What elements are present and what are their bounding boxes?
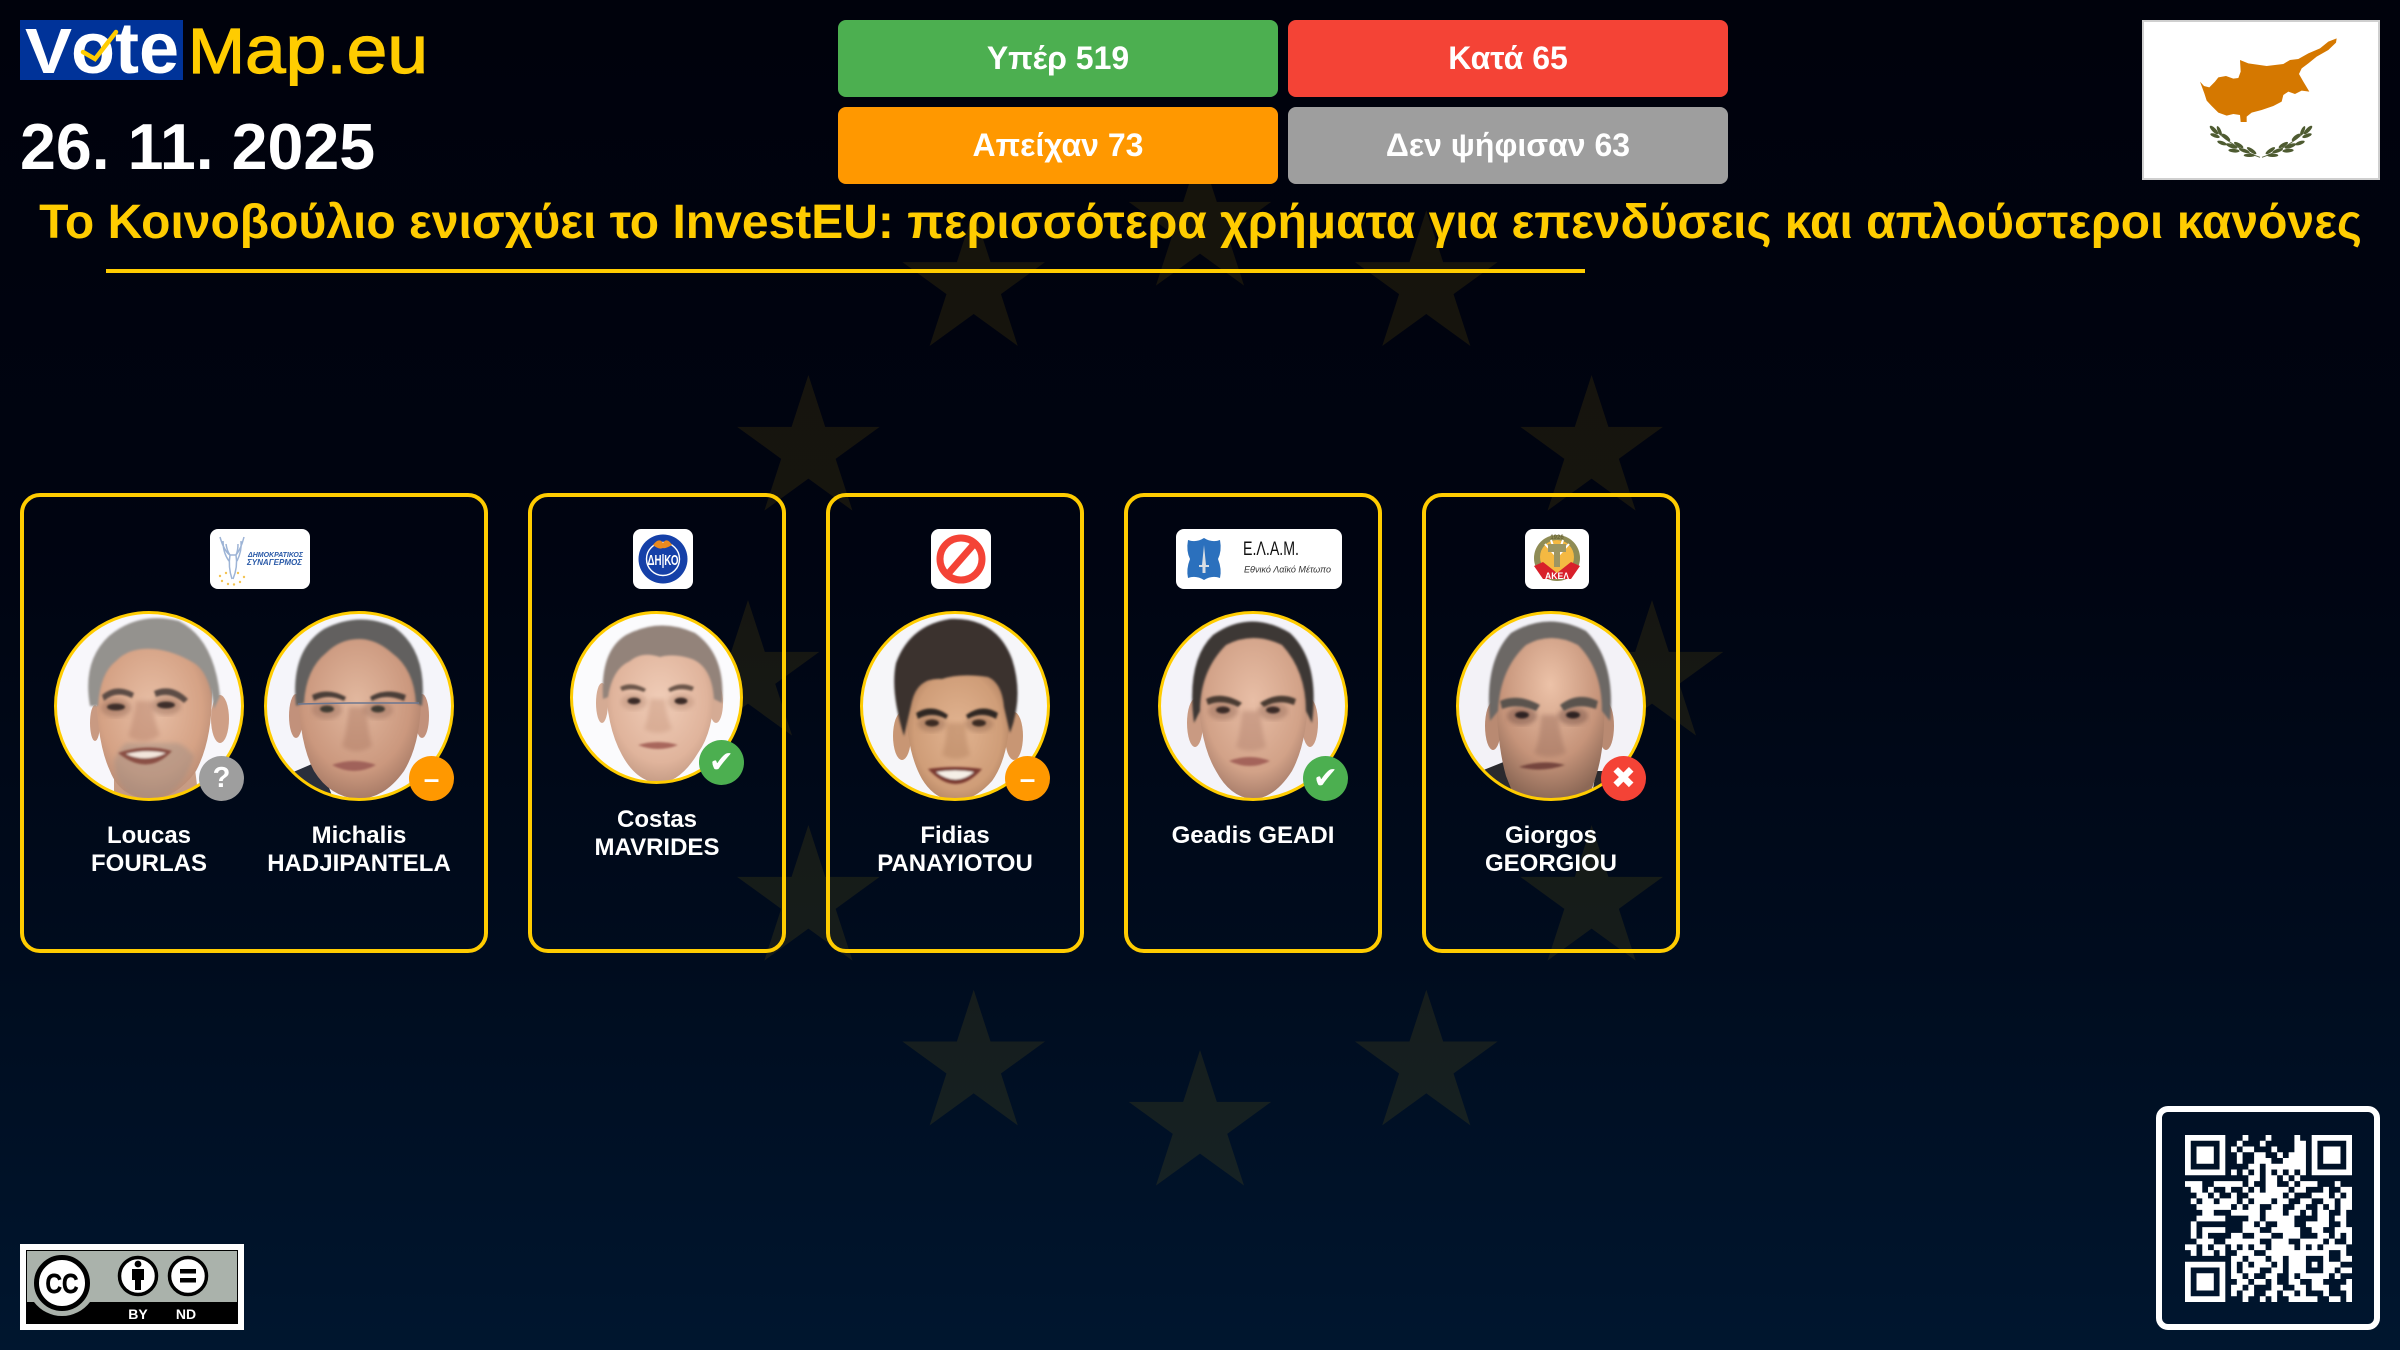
status badge: for <box>699 740 744 785</box>
panel: DISY group <box>20 493 488 953</box>
MEP: Giorgos Georgiou <box>1456 611 1646 876</box>
name <box>595 806 719 860</box>
flag of Cyprus <box>2142 20 2380 180</box>
name: Loucas <box>107 822 191 848</box>
QR code <box>2185 1135 2352 1302</box>
Creative Commons licence badge: BY <box>128 1306 148 1322</box>
status badge: against: ✖ <box>1611 761 1636 796</box>
portrait: Giorgos Georgiou <box>1456 611 1646 801</box>
status badge: did not vote: ? <box>213 762 230 794</box>
name: Giorgos <box>1505 822 1597 848</box>
party logo: AKEL: ΑΚΕΛ <box>1545 571 1569 581</box>
name: PANAYIOTOU <box>877 850 1033 876</box>
MEP: Loucas Fourlas <box>54 611 244 876</box>
status badge: for <box>1303 756 1348 801</box>
status badge: abstained <box>1005 756 1050 801</box>
name <box>1485 822 1617 876</box>
VoteMap.eu logo <box>20 20 428 86</box>
name: HADJIPANTELA <box>267 850 451 876</box>
vote totals <box>838 20 1728 184</box>
status badge: abstained <box>409 756 454 801</box>
party logo: DISY: ΔΗΜΟΚΡΑΤΙΚΟΣ <box>247 550 304 559</box>
party logo: DISY: ΣΥΝΑΓΕΡΜΟΣ <box>246 557 303 567</box>
party logo: ELAM: Ε.Λ.Α.Μ. <box>1243 539 1299 560</box>
portrait: Geadis Geadi <box>1158 611 1348 801</box>
panel: non-attached <box>826 493 1084 953</box>
name: FOURLAS <box>91 850 207 876</box>
MEP: Costas Mavrides <box>570 611 744 860</box>
title underline <box>106 269 1585 273</box>
name: Geadis GEADI <box>1172 822 1334 848</box>
MEP: Geadis Geadi <box>1158 611 1348 848</box>
party logo: AKEL <box>1525 529 1589 589</box>
for votes <box>838 20 1278 97</box>
portrait: Michalis Hadjipantela <box>264 611 454 801</box>
main title: Το Κοινοβούλιο ενισχύει το InvestEU: περισσότερα χρήματα για επενδύσεις και απλούστεροι κανόνες <box>39 196 2362 248</box>
panel: DIKO group <box>528 493 786 953</box>
MEP: Fidias Panayiotou <box>860 611 1050 876</box>
name <box>877 822 1033 876</box>
Creative Commons licence badge: ND <box>176 1306 196 1322</box>
did not vote: Δεν ψήφισαν 63 <box>1386 127 1630 163</box>
did not vote <box>1288 107 1728 184</box>
party logo: ELAM <box>1176 529 1342 589</box>
name: Michalis <box>312 822 406 848</box>
party logo: DIKO <box>633 529 693 589</box>
against votes <box>1288 20 1728 97</box>
Creative Commons licence badge: CC <box>46 1268 78 1299</box>
status badge: abstained: – <box>424 762 439 794</box>
portrait: Costas Mavrides <box>570 611 743 784</box>
status badge: abstained: – <box>1020 762 1035 794</box>
MEP: Michalis Hadjipantela <box>264 611 454 876</box>
date: 26. 11. 2025 <box>20 111 375 183</box>
panel: AKEL group <box>1422 493 1680 953</box>
status badge: against <box>1601 756 1646 801</box>
status badge: for: ✔ <box>709 745 734 780</box>
name <box>267 822 451 876</box>
name: GEORGIOU <box>1485 850 1617 876</box>
portrait: Loucas Fourlas <box>54 611 244 801</box>
party logo: no party symbol <box>931 529 991 589</box>
QR code frame <box>2156 1106 2380 1330</box>
status badge: for: ✔ <box>1313 761 1338 796</box>
portrait: Fidias Panayiotou <box>860 611 1050 801</box>
abstained votes: Απείχαν 73 <box>973 127 1143 163</box>
name: Fidias <box>920 822 990 848</box>
against votes: Κατά 65 <box>1448 40 1568 76</box>
name: MAVRIDES <box>595 834 719 860</box>
party logo: AKEL: 1926 <box>1550 535 1564 541</box>
status badge: did not vote <box>199 756 244 801</box>
for votes: Υπέρ 519 <box>987 40 1129 76</box>
name: Costas <box>617 806 697 832</box>
Creative Commons licence badge <box>20 1244 244 1330</box>
party logo: DISY <box>210 529 310 589</box>
name <box>91 822 207 876</box>
panel: ELAM group <box>1124 493 1382 953</box>
abstained votes <box>838 107 1278 184</box>
party logo: ELAM: Εθνικό Λαϊκό Μέτωπο <box>1244 565 1331 576</box>
